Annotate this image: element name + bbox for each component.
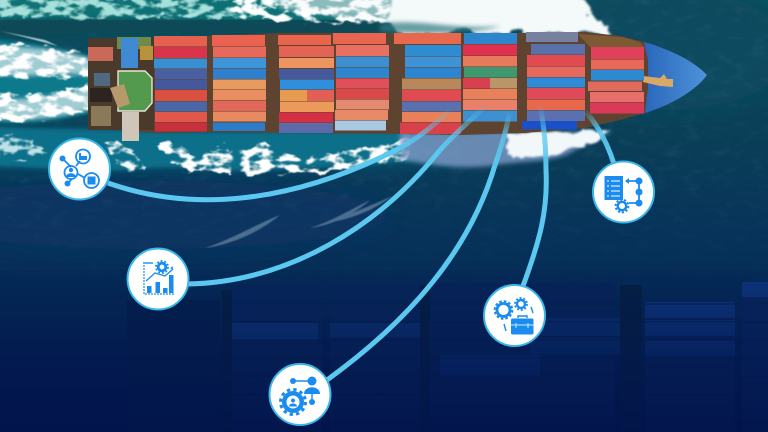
connector line 1 [108,148,400,200]
container bay 4 [333,33,389,130]
foam: stern wake [0,31,95,123]
connector line 2 fading over ship [440,105,486,150]
icon badge: person and settings gear [270,364,330,425]
stern deck [88,37,154,141]
bow crane [643,74,673,87]
container bay 3 [278,35,334,133]
container bay 6 [463,33,517,122]
ship [88,32,707,141]
ghosted container ship in the lower background [0,270,768,432]
container bay 1 [154,36,207,132]
stern platform [122,112,139,141]
connector line 5 [584,110,614,164]
foam: upper bow wave [0,0,611,38]
icon badge: gears and toolbox [484,285,545,346]
foam: lower hull wake [0,126,612,248]
bow [644,42,707,113]
blue deck panel [121,38,138,68]
icon badge: analytics chart with gear [128,248,188,310]
connector line 1 fading over ship [400,108,452,148]
helipad [118,71,152,111]
container bay 7 [522,32,585,130]
icon badge: network of people and goods [49,138,110,200]
connector line 3 [327,165,495,380]
container bay 5 [394,33,461,134]
ship hull [88,32,707,135]
container bay 2 [212,35,266,131]
connector line 3 fading over ship [495,110,510,165]
sea texture [0,130,520,300]
connector line 4 fading over ship [540,105,546,170]
container bay 8 [588,47,644,114]
connector line 2 [188,150,440,284]
forward deck machinery [578,34,644,47]
icon badge: checklist and workflow [593,162,654,222]
connector line 4 [523,170,546,286]
